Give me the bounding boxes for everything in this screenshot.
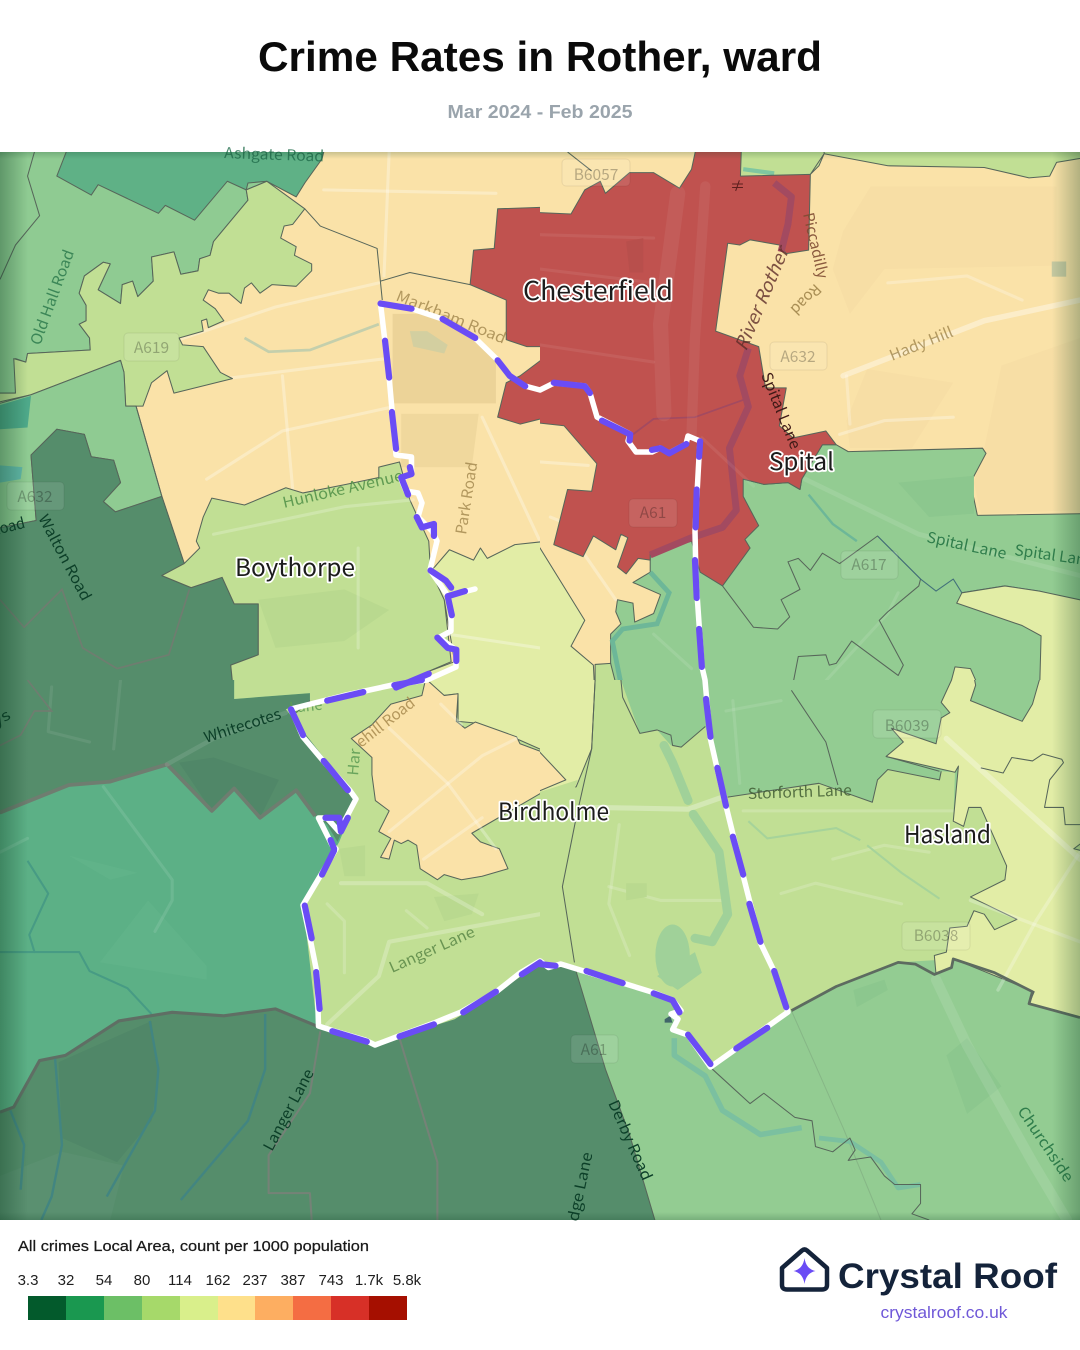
road number shields bbox=[7, 159, 970, 1063]
logo wordmark: Crystal Roof bbox=[838, 1257, 1057, 1296]
road number shields: A61 bbox=[640, 501, 666, 523]
place names: Spital bbox=[769, 442, 834, 477]
title: Crime Rates in Rother, ward bbox=[258, 33, 822, 80]
road and river labels: Old Hall Road bbox=[25, 247, 79, 348]
road and river labels: Derby Road bbox=[603, 1096, 658, 1184]
road and river labels: Walton Road bbox=[34, 510, 97, 604]
legend scale values bbox=[18, 1272, 422, 1289]
place names: Hasland bbox=[904, 815, 991, 850]
map area: south-west bbox=[0, 680, 540, 1220]
legend scale values: 3.3 bbox=[18, 1272, 38, 1289]
road number shields: A632 bbox=[17, 485, 53, 507]
ward boundary: white base line bbox=[291, 304, 788, 1067]
place names: Chesterfield bbox=[523, 271, 673, 308]
icon: house with star bbox=[782, 1250, 827, 1290]
legend scale values: 80 bbox=[134, 1272, 150, 1289]
road and river labels: Hunloke Avenue bbox=[280, 465, 405, 513]
place names: Birdholme bbox=[498, 792, 609, 827]
legend scale values: 32 bbox=[58, 1272, 74, 1289]
road and river labels: Spital Lane bbox=[925, 526, 1009, 564]
legend scale values: 237 bbox=[242, 1272, 268, 1289]
road and river labels: Storforth Lane bbox=[747, 779, 852, 804]
legend scale values: 114 bbox=[168, 1272, 192, 1289]
road and river labels: Langer Lane bbox=[385, 921, 478, 978]
place names: Boythorpe bbox=[235, 548, 355, 583]
legend scale values: 5.8k bbox=[393, 1272, 422, 1289]
legend title: All crimes Local Area, count per 1000 population bbox=[18, 1238, 369, 1255]
ward boundary: purple dashes bbox=[291, 304, 786, 1064]
road and river labels: Park Road bbox=[450, 460, 482, 536]
map area: north-east bbox=[540, 152, 1080, 680]
road and river labels: Markham Road bbox=[393, 285, 509, 348]
legend bbox=[18, 1238, 422, 1320]
legend scale values: 162 bbox=[205, 1272, 231, 1289]
road and river labels: Ashgate Road bbox=[224, 142, 324, 166]
road and river labels: Piccadilly bbox=[798, 210, 834, 281]
place names bbox=[235, 271, 991, 850]
road number shields: B6057 bbox=[574, 163, 618, 185]
road and river labels: Lane bbox=[288, 694, 323, 718]
legend scale values: 743 bbox=[318, 1272, 344, 1289]
map area: north-west bbox=[0, 152, 540, 680]
road and river labels: Road bbox=[786, 279, 826, 320]
road and river labels: Langer Lane bbox=[258, 1065, 319, 1154]
road and river labels: Hady Hill bbox=[886, 321, 956, 366]
map area: south-east bbox=[540, 680, 1080, 1220]
legend scale values: 387 bbox=[280, 1272, 306, 1289]
road number shields: A619 bbox=[134, 336, 169, 358]
logo: Crystal Roof bbox=[782, 1250, 1057, 1322]
legend scale values: 54 bbox=[96, 1272, 112, 1289]
road number shields: A632 bbox=[780, 345, 816, 367]
legend colour bar bbox=[28, 1296, 407, 1320]
website: crystalroof.co.uk bbox=[880, 1304, 1008, 1322]
road number shields: B6039 bbox=[885, 714, 929, 736]
road number shields: A61 bbox=[581, 1038, 607, 1060]
road and river labels: Har bbox=[342, 748, 365, 776]
road number shields: B6038 bbox=[914, 924, 958, 946]
subtitle: date range: Mar 2024 - Feb 2025 bbox=[448, 101, 632, 122]
map edge shading bbox=[0, 152, 1080, 1220]
road number shields: A617 bbox=[851, 553, 887, 575]
road and river labels: dge Lane bbox=[562, 1150, 597, 1223]
road and river labels: ehill Road bbox=[351, 692, 419, 752]
road and river labels: Whitecotes bbox=[201, 703, 284, 748]
road and river labels: Churchside bbox=[1013, 1102, 1079, 1186]
legend scale values: 1.7k bbox=[355, 1272, 384, 1289]
road and river labels: Spital Lane bbox=[756, 369, 806, 452]
road and river labels: River Rother bbox=[728, 240, 796, 354]
road and river labels: ≠ bbox=[730, 175, 745, 196]
